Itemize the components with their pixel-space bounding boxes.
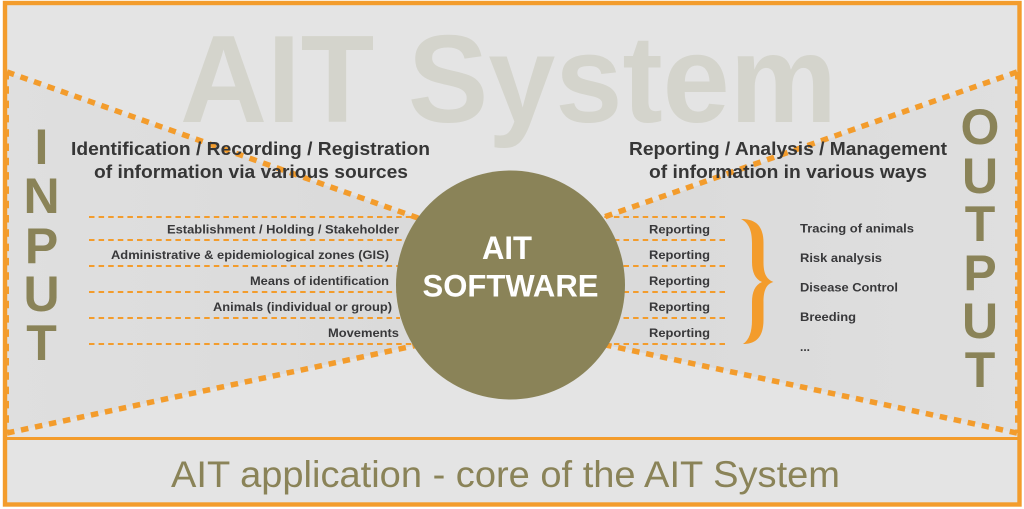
divider above application band [5,437,1019,440]
output uses list: Breeding [800,310,856,324]
input items list: Administrative & epidemiological zones (GIS) [111,248,389,262]
vertical label: OUTPUT: T [965,342,995,398]
input funnel dashed outline [6,72,418,433]
vertical label: OUTPUT: O [961,99,999,155]
central circle: AIT software: SOFTWARE [422,268,598,304]
output funnel dashed outline [604,72,1018,433]
panel: output funnel [606,72,1017,433]
output uses list: Risk analysis [800,251,882,265]
input items list: Animals (individual or group) [213,300,392,314]
heading: output description [629,139,947,182]
panel: input funnel [7,72,418,433]
reporting items list: Reporting [649,300,710,314]
heading: input description: of information via various sources [94,162,408,182]
vertical label: INPUT: U [23,266,60,322]
output uses list: ... [800,340,810,354]
heading: input description: Identification / Recording / Registration [71,139,430,159]
reporting items list [649,222,710,340]
vertical label: INPUT [23,119,60,371]
output uses list: Disease Control [800,281,898,295]
reporting items list: Reporting [649,274,710,288]
input items list: Means of identification [250,274,389,288]
vertical label: OUTPUT: P [963,245,997,301]
vertical label: OUTPUT [961,99,999,398]
vertical label: OUTPUT: T [965,196,995,252]
reporting items list: Reporting [649,248,710,262]
icon: curly brace [741,219,774,344]
heading: output description: of information in various ways [649,162,927,182]
footer title: AIT application: AIT application - core of the AIT System [171,454,840,495]
input row dashed lines [89,217,420,344]
output uses list: Tracing of animals [800,222,914,236]
reporting items list: Reporting [649,326,710,340]
input items list [111,222,399,340]
output row dashed lines [600,217,725,344]
watermark title: AIT System: AIT System [180,11,837,149]
reporting items list: Reporting [649,222,710,236]
panel: AIT application background [5,439,1019,505]
central circle: AIT software: AIT [482,230,532,266]
heading: output description: Reporting / Analysis / Management [629,139,947,159]
vertical label: INPUT: I [35,119,48,175]
central circle: AIT software [396,170,625,400]
vertical label: INPUT: N [23,168,60,224]
input items list: Establishment / Holding / Stakeholder [167,222,399,236]
vertical label: OUTPUT: U [962,148,998,204]
heading: input description [71,139,430,182]
vertical label: INPUT: P [25,218,58,274]
vertical label: OUTPUT: U [962,293,998,349]
input items list: Movements [328,326,399,340]
output uses list [800,222,914,354]
vertical label: INPUT: T [26,315,57,371]
